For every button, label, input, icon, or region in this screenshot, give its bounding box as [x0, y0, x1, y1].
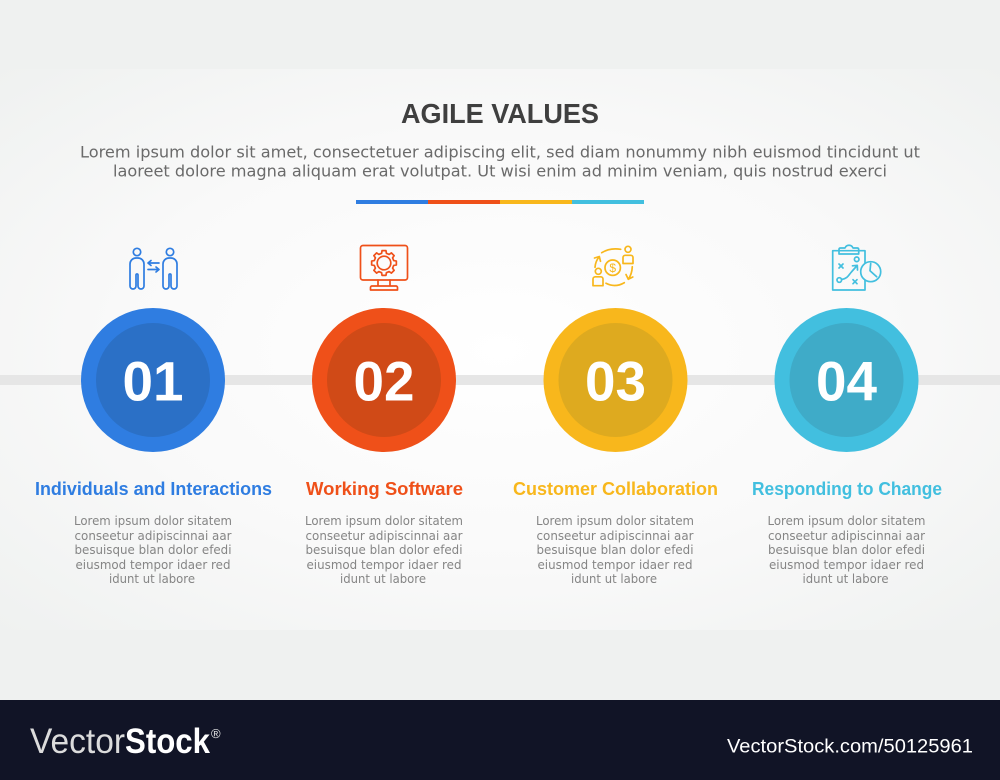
image id: VectorStock.com/50125961 [727, 736, 973, 758]
heading: Responding to Change [752, 478, 942, 499]
body text: idunt ut labore [571, 572, 657, 586]
timeline bar [0, 375, 1000, 385]
body text [768, 514, 926, 586]
number circle 01: 01 [122, 350, 184, 412]
icon: two people exchanging [130, 248, 177, 289]
number circle 04 [774, 308, 918, 452]
body text: besuisque blan dolor efedi [536, 543, 694, 557]
body text [536, 514, 694, 586]
body text: eiusmod tempor idaer red [769, 558, 924, 572]
body text [305, 514, 463, 586]
title: AGILE VALUES [401, 98, 599, 129]
body text [74, 514, 232, 586]
body text: conseetur adipiscinnai aar [74, 529, 232, 543]
body text: eiusmod tempor idaer red [538, 558, 692, 572]
subtitle text: laoreet dolore magna aliquam erat volutpat. Ut wisi enim ad minim veniam, quis nostrud exerci [113, 162, 887, 180]
number circle 01 [81, 308, 225, 452]
body text: Lorem ipsum dolor sitatem [305, 514, 463, 528]
body text: conseetur adipiscinnai aar [536, 529, 694, 543]
column 2: Working Software [305, 246, 463, 586]
body text: idunt ut labore [109, 572, 195, 586]
number circle 03: 03 [585, 350, 646, 412]
body text: Lorem ipsum dolor sitatem [536, 514, 694, 528]
icon: monitor with gear [360, 246, 408, 290]
icon: money cycle between people: $ [609, 261, 616, 275]
body text: Lorem ipsum dolor sitatem [768, 514, 926, 528]
column 4: Responding to Change [752, 245, 942, 586]
body text: besuisque blan dolor efedi [74, 543, 232, 557]
heading: Customer Collaboration [513, 478, 718, 499]
brand logo: Stock: Stock [125, 722, 210, 761]
brand logo: Vector: Vector [30, 722, 125, 761]
body text: eiusmod tempor idaer red [306, 558, 462, 572]
icon: money cycle between people [593, 246, 633, 286]
column 1: Individuals and Interactions [35, 248, 272, 586]
icon: clipboard plan with clock [833, 245, 881, 290]
heading: Working Software [306, 478, 463, 499]
four-colour divider [356, 200, 644, 204]
registered mark: ® [211, 726, 221, 741]
body text: idunt ut labore [340, 572, 426, 586]
number circle 02 [312, 308, 456, 452]
subtitle text: Lorem ipsum dolor sit amet, consectetuer adipiscing elit, sed diam nonummy nibh euismod tincidunt ut [80, 142, 920, 162]
footer band [0, 700, 1000, 780]
number circle 02: 02 [354, 350, 414, 412]
body text: besuisque blan dolor efedi [768, 543, 925, 557]
body text: idunt ut labore [802, 572, 888, 586]
subtitle text [80, 142, 920, 180]
column 3: Customer Collaboration [513, 246, 718, 586]
heading: Individuals and Interactions [35, 478, 272, 499]
number circle 04: 04 [816, 350, 877, 412]
number circle 03 [544, 308, 688, 452]
body text: Lorem ipsum dolor sitatem [74, 514, 232, 528]
body text: conseetur adipiscinnai aar [768, 529, 925, 543]
body text: eiusmod tempor idaer red [76, 558, 230, 572]
body text: besuisque blan dolor efedi [306, 543, 462, 557]
body text: conseetur adipiscinnai aar [306, 529, 463, 543]
